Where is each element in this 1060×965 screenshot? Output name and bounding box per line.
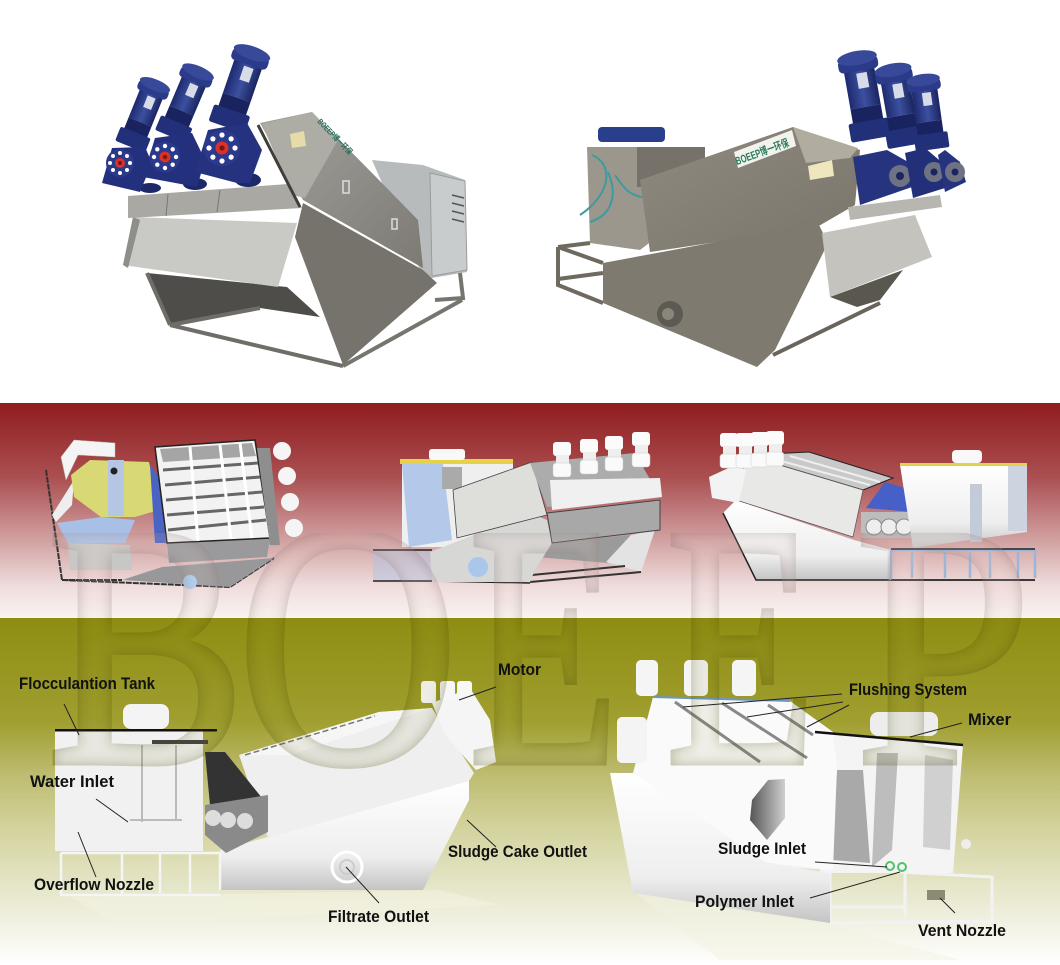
upper plate: [736, 455, 863, 537]
top stripes: [746, 452, 893, 490]
leader lines: [64, 687, 962, 913]
base frame: [891, 550, 1035, 580]
motor 1: [553, 442, 571, 477]
wheels: [205, 795, 268, 853]
logo strip: BOEEP博一环保: [316, 116, 355, 156]
grey covers under motors: [128, 184, 302, 218]
frame rails: [891, 549, 1035, 580]
green polymer rings: [886, 862, 894, 870]
tank: [815, 732, 963, 873]
motor 3: [905, 72, 950, 152]
frame: [46, 470, 274, 587]
motor 2: [873, 60, 925, 149]
photo: dewatering machine front view: [102, 40, 467, 366]
base plate: [122, 558, 274, 587]
gearbox 2: [905, 148, 945, 198]
motor caps: [421, 681, 436, 703]
dark rail: [258, 125, 300, 207]
upper side plate: [260, 112, 423, 268]
grey box: [68, 543, 132, 570]
blue panel: [57, 517, 135, 543]
top motors: [636, 660, 658, 696]
outlet flange: [657, 301, 683, 327]
motor 3: [208, 40, 272, 133]
label: Overflow Nozzle: Overflow Nozzle: [34, 875, 154, 894]
blue hoses: [580, 155, 642, 222]
logo text: BOEEP博一环保: [733, 136, 791, 168]
label: Mixer: Mixer: [968, 710, 1011, 729]
lower plate: [723, 500, 891, 580]
lower body: [610, 773, 830, 923]
upper plate: [239, 708, 474, 838]
tank lid: [900, 463, 1027, 466]
upper plate: [640, 127, 860, 252]
gearbox stack: [432, 688, 496, 770]
motor 2: [155, 60, 216, 143]
CAD view B: side view: [373, 432, 662, 583]
handles: [343, 181, 397, 229]
gearbox 3: [938, 150, 966, 192]
chute: [822, 215, 932, 297]
lower side plate: [295, 203, 437, 365]
gearboxes: [709, 465, 746, 503]
motor 4: [766, 431, 784, 466]
label: Water Inlet: Water Inlet: [30, 772, 114, 791]
mixer: [123, 704, 169, 729]
right underside: [537, 535, 631, 563]
label: Flushing System: Flushing System: [849, 680, 967, 699]
tank grey panel 1: [832, 770, 870, 863]
motor 3: [751, 432, 769, 467]
elbow pipe: [750, 779, 785, 840]
tank: [55, 731, 203, 851]
warning label: [290, 131, 306, 148]
floor shadow: [70, 890, 500, 925]
side grey bar: [257, 448, 280, 545]
drive discs: [139, 173, 261, 193]
tank lid: [815, 732, 963, 745]
base frame: [61, 853, 220, 895]
filtrate flange: [332, 852, 362, 882]
frame: [373, 550, 432, 582]
label: Sludge Inlet: Sludge Inlet: [718, 839, 806, 858]
gearbox 1: [853, 150, 912, 205]
base frame: [767, 865, 992, 923]
tank white: [402, 462, 513, 547]
motor 1: [836, 48, 891, 143]
white motors: [273, 442, 291, 460]
mixer: [429, 449, 465, 460]
main body: [633, 697, 837, 870]
CAD view C: side view: [709, 431, 1035, 580]
blue motors: [866, 482, 912, 512]
blue motor strip: [150, 465, 166, 543]
blue top edge: [653, 697, 790, 701]
gearbox 2: [143, 133, 205, 187]
lower plate: [603, 223, 828, 367]
motor 4: [632, 432, 650, 467]
BOEEP watermark lettering, olive band part: [52, 618, 1021, 769]
vents: [452, 195, 464, 222]
yellow tank: [71, 460, 159, 517]
frame rear: [343, 273, 463, 366]
tank grey panel 2: [872, 753, 898, 867]
lower plate: [430, 513, 552, 582]
tank grey panel 3: [923, 755, 953, 850]
tank lid: [55, 729, 217, 732]
frame rear strut: [773, 303, 880, 355]
overflow nub: [961, 839, 971, 849]
support frame: [558, 243, 603, 303]
motor 1: [720, 433, 738, 468]
front chute: [123, 217, 297, 287]
grey plate behind motors: [530, 453, 660, 507]
warning label: [808, 160, 834, 180]
tank box: [587, 147, 705, 250]
mixer motor: [598, 127, 665, 142]
left gearbox: [617, 717, 647, 763]
CAD view A: top view: [46, 440, 303, 589]
BOEEP watermark lettering, red band part: [52, 533, 1022, 618]
olive band behind labelled diagrams: [0, 618, 1060, 965]
base frame: [147, 273, 343, 366]
gearbox 3: [195, 123, 262, 183]
background: white photo area: [0, 0, 1060, 403]
white gearboxes: [550, 478, 662, 510]
label: Sludge Cake Outlet: Sludge Cake Outlet: [448, 842, 587, 861]
top face: [793, 127, 858, 163]
lower filter panel: [167, 538, 270, 563]
black motors: [205, 752, 262, 810]
dark under chute: [830, 270, 903, 307]
CAD diagram right: labelled machine: [610, 660, 992, 960]
CAD diagram left: labelled machine: [55, 681, 500, 925]
wheels: [861, 512, 913, 538]
photo: dewatering machine rear view: [558, 48, 966, 367]
tank yellow lid: [400, 459, 513, 464]
logo plate: [734, 130, 796, 168]
flushing pipes: [675, 702, 813, 762]
label: Vent Nozzle: Vent Nozzle: [918, 921, 1006, 940]
tank: [900, 465, 1027, 548]
upper plate: [453, 462, 547, 538]
motor 2: [736, 433, 754, 468]
chute: [547, 500, 660, 543]
label: Polymer Inlet: Polymer Inlet: [695, 892, 794, 911]
tank bracket detail: [130, 745, 182, 822]
mixer: [952, 450, 982, 463]
back control box: [372, 160, 467, 278]
mixer: [870, 712, 938, 736]
lower body: [220, 780, 469, 890]
motor 2: [580, 439, 598, 474]
vent pipe: [927, 890, 945, 900]
label: Flocculantion Tank: Flocculantion Tank: [19, 674, 155, 693]
label: Filtrate Outlet: Filtrate Outlet: [328, 907, 429, 926]
gearbox 1: [102, 147, 152, 192]
dark hopper: [147, 273, 320, 325]
tank blue panel: [402, 464, 452, 547]
filter grid: [155, 440, 270, 543]
motor 3: [605, 436, 623, 471]
red band behind CAD views: [0, 403, 1060, 618]
motor 1: [115, 74, 172, 153]
label: Motor: Motor: [498, 660, 541, 679]
bottom stripes: [530, 566, 641, 582]
cover plates: [848, 195, 942, 220]
white side boxes: [61, 440, 115, 480]
floor shadow: [635, 893, 960, 960]
